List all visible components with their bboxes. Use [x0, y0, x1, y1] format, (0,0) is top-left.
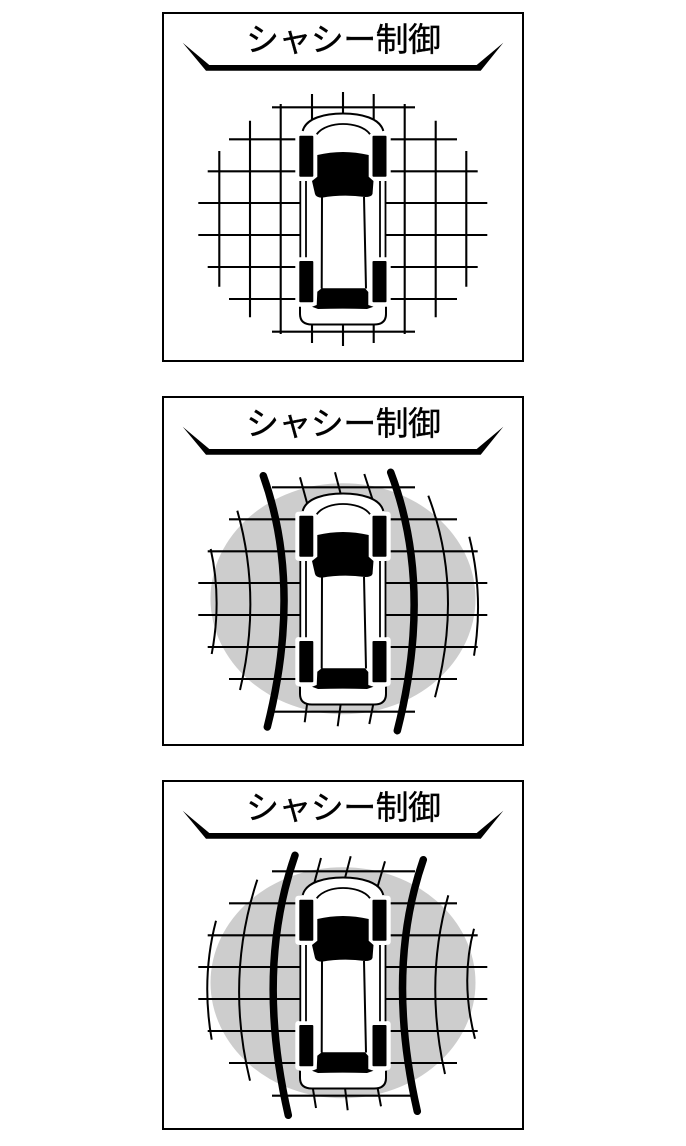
heading banner: [183, 811, 503, 839]
car top view: [295, 878, 391, 1088]
grid lines curving outward: [198, 472, 487, 726]
thick right curve: [391, 472, 414, 731]
heading banner: [183, 427, 503, 455]
heading banner: [183, 43, 503, 71]
panel: chassis control, grid bending inward: [163, 781, 523, 1129]
grey control area: [210, 483, 476, 714]
panel: chassis control, grid bending outward: [163, 397, 523, 745]
panel: chassis control, straight grid: [163, 13, 523, 361]
heading: chassis control: シャシー制御: [246, 405, 441, 442]
thick right curve: [403, 860, 423, 1111]
car top view: [295, 494, 391, 704]
grey control area: [210, 867, 476, 1098]
heading: chassis control: シャシー制御: [246, 21, 441, 58]
thick left curve: [263, 476, 284, 727]
thick left curve: [273, 855, 295, 1115]
heading: chassis control: シャシー制御: [246, 789, 441, 826]
straight grid: [198, 92, 487, 346]
grid lines curving inward: [198, 856, 487, 1110]
car top view: [295, 114, 391, 324]
